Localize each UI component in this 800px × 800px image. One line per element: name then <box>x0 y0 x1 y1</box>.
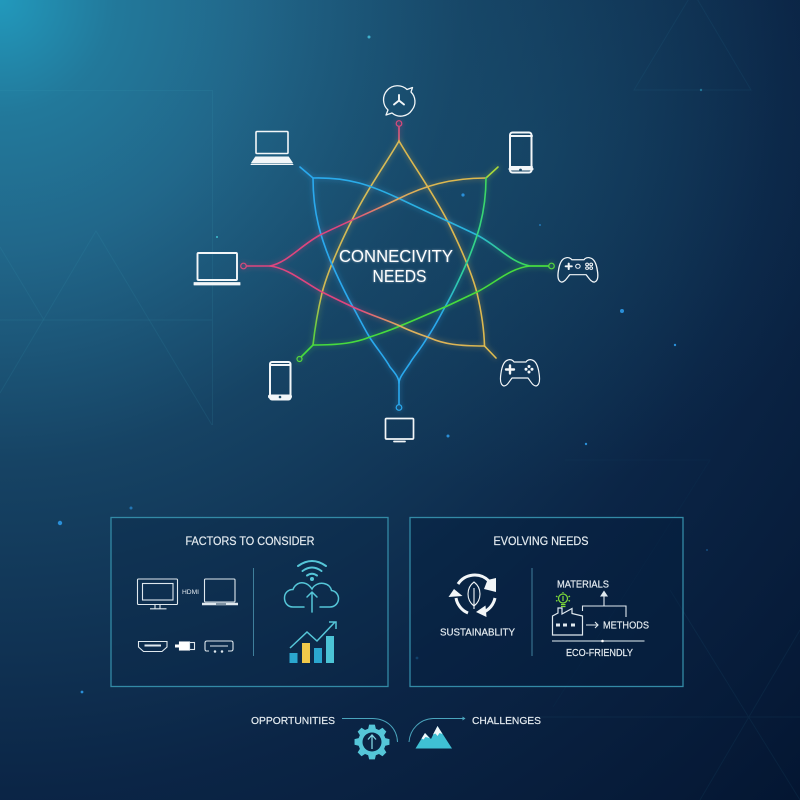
challenges <box>409 715 541 748</box>
title: connecivity needs: NEEDS <box>372 266 426 286</box>
icon: recycling leaf <box>448 575 496 617</box>
line: upper left tail <box>300 167 313 178</box>
label: challenges: CHALLENGES <box>472 715 541 727</box>
node: lower left <box>297 356 302 362</box>
line: upper right to bottom <box>399 178 486 383</box>
line: upper left to bottom <box>313 178 399 404</box>
icon: monitor bottom <box>386 418 414 442</box>
icon: gear with up arrow <box>355 725 389 759</box>
eco-friendly rule <box>552 640 644 642</box>
panel: evolving needs <box>410 518 683 686</box>
icon: phone upper right <box>510 132 532 172</box>
icon: laptop upper left <box>251 132 293 164</box>
glowing star lines <box>241 121 554 410</box>
device icons <box>194 86 598 442</box>
icon: laptop left <box>194 253 240 285</box>
icon: factory with bulb <box>552 592 582 635</box>
label: hdmi: HDMI <box>182 590 199 596</box>
icon: phone lower left <box>270 362 290 400</box>
network diagram <box>194 86 598 442</box>
divider <box>252 568 254 656</box>
label: eco-friendly: ECO-FRIENDLY <box>566 648 633 659</box>
line: top node <box>398 127 400 141</box>
icon: mountains <box>416 726 452 748</box>
opportunities <box>251 715 398 759</box>
node: right <box>549 263 554 269</box>
arrows: bracket to materials and methods <box>582 592 626 628</box>
line: lower left to right <box>313 266 548 345</box>
chart: rising bars <box>290 622 336 663</box>
heading: evolving needs: EVOLVING NEEDS <box>494 536 589 548</box>
icon: clock <box>384 86 415 116</box>
line: upper right tail <box>486 167 498 178</box>
scattered particles <box>58 36 708 693</box>
icon: cable connectors <box>138 641 233 652</box>
panel: factors to consider <box>111 518 388 686</box>
arrow: opportunities arc <box>342 718 398 742</box>
icon: monitor hdmi laptop <box>138 579 238 609</box>
divider <box>531 568 533 656</box>
title: connecivity needs <box>339 246 453 286</box>
line: lower right to left <box>270 266 484 346</box>
node: top <box>396 121 402 126</box>
line: upper left to right <box>313 178 548 266</box>
label: materials: MATERIALS <box>557 580 609 590</box>
icon: gamepad right <box>558 258 598 282</box>
arrow: challenges arc <box>409 716 466 742</box>
label: opportunities: OPPORTUNITIES <box>251 715 335 727</box>
icon: wifi cloud upload <box>284 561 338 612</box>
title: connecivity needs: CONNECIVITY <box>339 246 453 266</box>
label: methods: METHODS <box>603 620 649 632</box>
line: upper right to left <box>246 178 486 266</box>
icon: gamepad lower right <box>500 360 540 386</box>
line: top to lower left <box>313 141 399 345</box>
heading: factors to consider: FACTORS TO CONSIDER <box>186 536 314 548</box>
line: top to lower right <box>399 141 484 346</box>
line: lower right tail <box>484 346 496 358</box>
node: left <box>241 263 246 269</box>
label: sustainablity: SUSTAINABLITY <box>440 628 515 638</box>
line: lower left tail <box>302 345 313 356</box>
node: bottom <box>396 405 402 410</box>
